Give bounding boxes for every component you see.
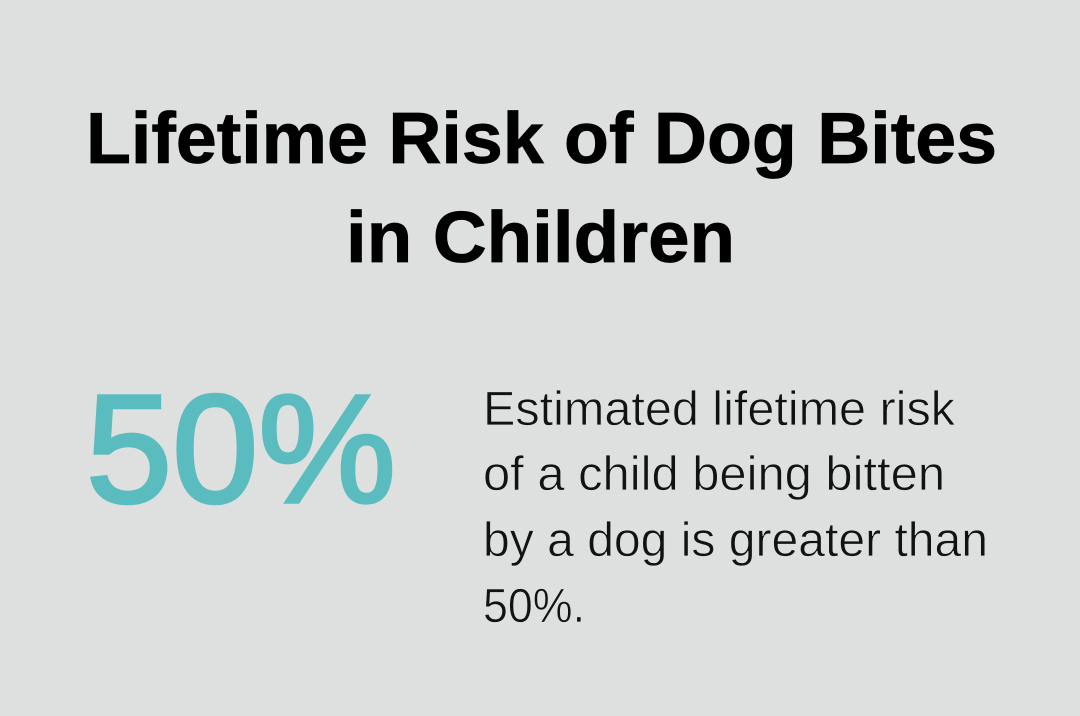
description text: 50%. — [483, 580, 585, 633]
title: Lifetime Risk of Dog Bites — [86, 99, 997, 179]
title — [86, 99, 997, 278]
title: in Children — [346, 198, 735, 278]
description text: Estimated lifetime risk — [483, 383, 956, 436]
description text: by a dog is greater than — [483, 514, 988, 567]
description text — [483, 383, 988, 633]
big statistic: 50%: 50% — [86, 363, 396, 535]
description text: of a child being bitten — [483, 448, 945, 501]
